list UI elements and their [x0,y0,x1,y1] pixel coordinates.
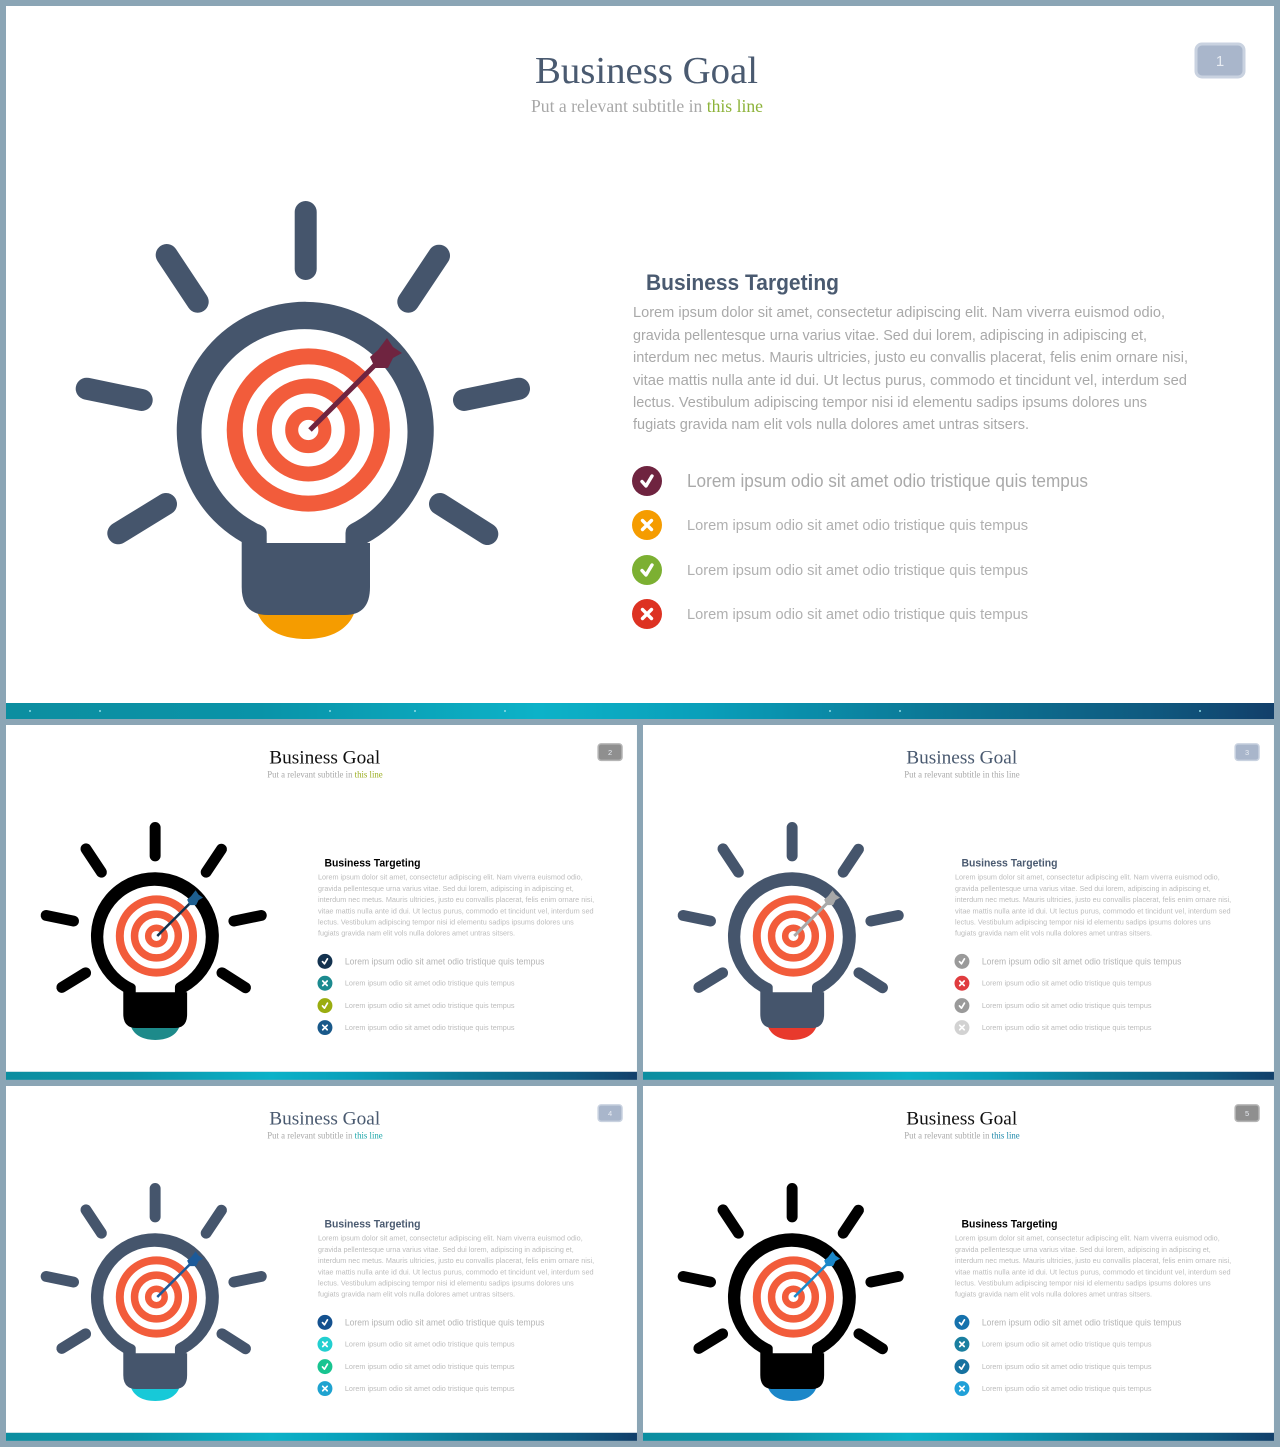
target rings [235,356,382,504]
body paragraph [318,873,594,937]
item: check: Lorem ipsum odio sit amet odio tristique quis tempus [687,471,1088,491]
checklist: Lorem ipsum odio sit amet odio tristique quis tempus [982,1001,1152,1010]
body paragraph: lectus. Vestibulum adipiscing tempor nisi id elementu sadips ipsums dolores uns [633,394,1147,411]
footer band [643,1433,1274,1441]
light rays [87,212,519,534]
slide 4: slate and cyan variant [6,1086,637,1441]
body paragraph: fugiats gravida nam elit vols nulla dolores amet untras sitsers. [633,416,1029,433]
body paragraph: vitae mattis nulla ante id dui. Ut lectus purus, commodo et tincidunt vel, interdum sed [633,372,1187,389]
page number badge: 4 [608,1109,612,1118]
body paragraph: lectus. Vestibulum adipiscing tempor nisi id elementu sadips ipsums dolores uns [318,918,574,927]
slide 2: black variant [6,725,637,1080]
body paragraph: Lorem ipsum dolor sit amet, consectetur adipiscing elit. Nam viverra euismod odio, [955,1234,1220,1243]
page number badge [598,744,622,760]
item: cross [632,599,1028,629]
checklist: Lorem ipsum odio sit amet odio tristique quis tempus [982,1362,1152,1371]
bulb body [177,302,434,615]
subtitle: Put a relevant subtitle in this line [267,1131,383,1141]
body paragraph: vitae mattis nulla ante id dui. Ut lectus purus, commodo et tincidunt vel, interdum sed [318,907,594,916]
checklist: Lorem ipsum odio sit amet odio tristique quis tempus [345,1340,515,1349]
body paragraph: lectus. Vestibulum adipiscing tempor nisi id elementu sadips ipsums dolores uns [955,918,1211,927]
checklist [317,954,545,1035]
footer band [6,703,1274,719]
body paragraph: fugiats gravida nam elit vols nulla dolores amet untras sitsers. [955,928,1152,937]
title: Business Goal [269,1108,380,1129]
heading: Business Targeting [324,857,421,869]
footer band [643,1072,1274,1080]
body paragraph: interdum nec metus. Mauris ultricies, justo eu convallis placerat, felis enim ornare nisi, [633,349,1188,366]
subtitle: Put a relevant subtitle in this line [904,1131,1020,1141]
checklist [954,1315,1182,1396]
body paragraph: Lorem ipsum dolor sit amet, consectetur adipiscing elit. Nam viverra euismod odio, [955,873,1220,882]
body paragraph: gravida pellentesque urna varius vitae. Sed dui lorem, adipiscing in adipiscing et, [955,884,1211,893]
icon: light bulb with target [683,1189,898,1401]
item: cross: Lorem ipsum odio sit amet odio tristique quis tempus [687,606,1028,623]
page number badge [1235,744,1259,760]
item: check [632,466,1088,496]
body paragraph: gravida pellentesque urna varius vitae. Sed dui lorem, adipiscing in adipiscing et, [633,327,1147,344]
body paragraph: vitae mattis nulla ante id dui. Ut lectus purus, commodo et tincidunt vel, interdum sed [955,1268,1231,1277]
icon: light bulb with target [46,1189,261,1401]
body paragraph: Lorem ipsum dolor sit amet, consectetur adipiscing elit. Nam viverra euismod odio, [318,1234,583,1243]
checklist: Lorem ipsum odio sit amet odio tristique quis tempus [345,1317,545,1327]
body paragraph: vitae mattis nulla ante id dui. Ut lectus purus, commodo et tincidunt vel, interdum sed [318,1268,594,1277]
body paragraph: interdum nec metus. Mauris ultricies, justo eu convallis placerat, felis enim ornare nisi, [318,895,594,904]
body paragraph: gravida pellentesque urna varius vitae. Sed dui lorem, adipiscing in adipiscing et, [955,1245,1211,1254]
page number badge [598,1105,622,1121]
page number badge: 5 [1245,1109,1249,1118]
body paragraph: fugiats gravida nam elit vols nulla dolores amet untras sitsers. [318,1289,515,1298]
slide 3: slate and red variant [643,725,1274,1080]
body paragraph: lectus. Vestibulum adipiscing tempor nisi id elementu sadips ipsums dolores uns [955,1279,1211,1288]
subtitle: Put a relevant subtitle in this line [531,96,763,116]
heading: Business Targeting [961,857,1058,869]
heading: Business Targeting [646,270,839,295]
body paragraph [955,873,1231,937]
body paragraph: gravida pellentesque urna varius vitae. Sed dui lorem, adipiscing in adipiscing et, [318,884,574,893]
page number badge [1235,1105,1259,1121]
heading: Business Targeting [324,1218,421,1230]
heading: Business Targeting [961,1218,1058,1230]
page number badge: 2 [608,748,612,757]
body paragraph: Lorem ipsum dolor sit amet, consectetur adipiscing elit. Nam viverra euismod odio, [318,873,583,882]
slide 5: black and blue variant [643,1086,1274,1441]
body paragraph: vitae mattis nulla ante id dui. Ut lectus purus, commodo et tincidunt vel, interdum sed [955,907,1231,916]
icon: light bulb with target [683,828,898,1040]
checklist: Lorem ipsum odio sit amet odio tristique quis tempus [345,1384,515,1393]
body paragraph: fugiats gravida nam elit vols nulla dolores amet untras sitsers. [955,1289,1152,1298]
checklist: Lorem ipsum odio sit amet odio tristique quis tempus [982,1317,1182,1327]
checklist: Lorem ipsum odio sit amet odio tristique quis tempus [345,979,515,988]
body paragraph [633,304,1188,433]
body paragraph [955,1234,1231,1298]
checklist: Lorem ipsum odio sit amet odio tristique quis tempus [982,1023,1152,1032]
footer band [6,1433,637,1441]
title: Business Goal [906,747,1017,768]
title: Business Goal [269,747,380,768]
item: check: Lorem ipsum odio sit amet odio tristique quis tempus [687,562,1028,579]
page number badge: 3 [1245,748,1249,757]
page number badge: 1 [1216,53,1224,70]
icon: light bulb with target [87,212,519,639]
bulb tip [257,611,355,639]
footer band [6,1072,637,1080]
checklist: Lorem ipsum odio sit amet odio tristique quis tempus [982,1340,1152,1349]
checklist [632,466,1088,629]
subtitle: Put a relevant subtitle in this line [267,770,383,780]
checklist [954,954,1182,1035]
title: Business Goal [906,1108,1017,1129]
item: cross [632,510,1028,540]
checklist: Lorem ipsum odio sit amet odio tristique quis tempus [982,979,1152,988]
arrow [310,338,402,430]
body paragraph: gravida pellentesque urna varius vitae. Sed dui lorem, adipiscing in adipiscing et, [318,1245,574,1254]
body paragraph: fugiats gravida nam elit vols nulla dolores amet untras sitsers. [318,928,515,937]
checklist: Lorem ipsum odio sit amet odio tristique quis tempus [345,1001,515,1010]
checklist: Lorem ipsum odio sit amet odio tristique quis tempus [345,1362,515,1371]
body paragraph: interdum nec metus. Mauris ultricies, justo eu convallis placerat, felis enim ornare nisi, [955,1256,1231,1265]
body paragraph: interdum nec metus. Mauris ultricies, justo eu convallis placerat, felis enim ornare nisi, [318,1256,594,1265]
checklist: Lorem ipsum odio sit amet odio tristique quis tempus [345,1023,515,1032]
checklist: Lorem ipsum odio sit amet odio tristique quis tempus [982,1384,1152,1393]
body paragraph: Lorem ipsum dolor sit amet, consectetur adipiscing elit. Nam viverra euismod odio, [633,304,1165,321]
page number badge [1196,44,1244,77]
body paragraph: interdum nec metus. Mauris ultricies, justo eu convallis placerat, felis enim ornare nisi, [955,895,1231,904]
item: cross: Lorem ipsum odio sit amet odio tristique quis tempus [687,517,1028,534]
title: Business Goal [535,50,758,92]
icon: light bulb with target [46,828,261,1040]
body paragraph [318,1234,594,1298]
checklist: Lorem ipsum odio sit amet odio tristique quis tempus [982,956,1182,966]
item: check [632,555,1028,585]
checklist [317,1315,545,1396]
body paragraph: lectus. Vestibulum adipiscing tempor nisi id elementu sadips ipsums dolores uns [318,1279,574,1288]
checklist: Lorem ipsum odio sit amet odio tristique quis tempus [345,956,545,966]
subtitle: Put a relevant subtitle in this line [904,770,1020,780]
slide 1: main panel [6,6,1274,719]
